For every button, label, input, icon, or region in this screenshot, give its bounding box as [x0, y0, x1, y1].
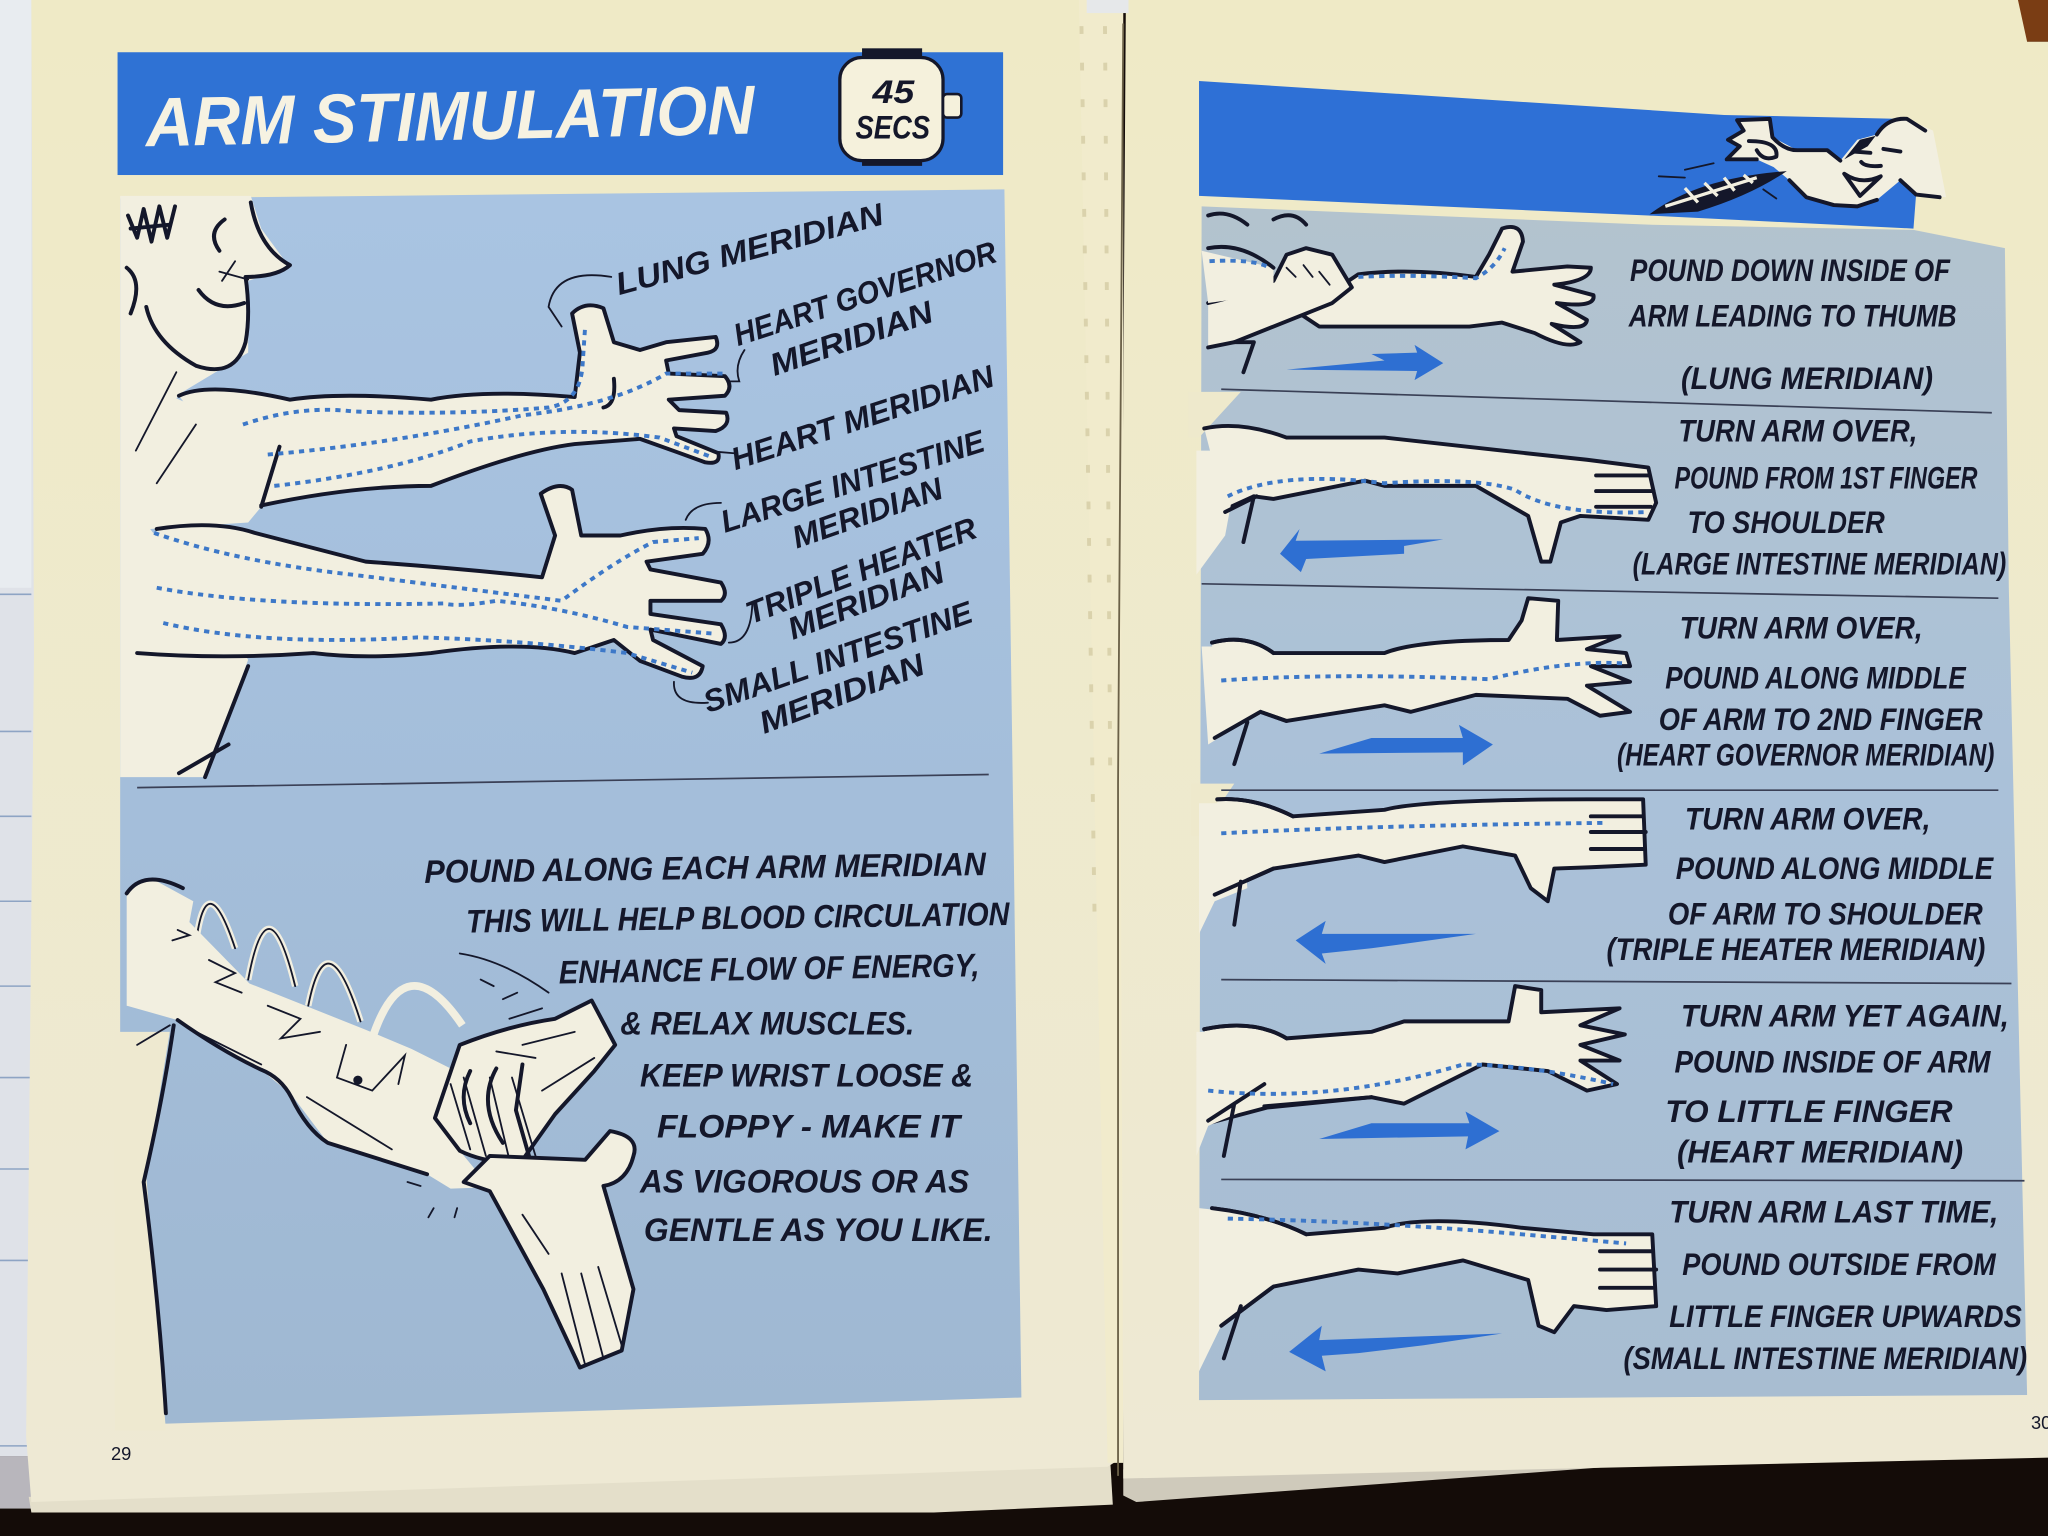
text block: instructions left page: ENHANCE FLOW OF ENERGY, — [558, 946, 980, 991]
under sheet of left page — [29, 1460, 1113, 1512]
panel: right page header band — [1199, 81, 1916, 229]
labels: meridian names — [612, 196, 1001, 741]
text: step 3: POUND ALONG MIDDLE — [1665, 660, 1967, 695]
panel: right page blue background — [1199, 206, 2027, 1400]
row 3: heart governor meridian — [1202, 598, 1630, 765]
text: step 4: TURN ARM OVER, — [1685, 801, 1930, 836]
cream cut-outs at left edge — [1189, 392, 1241, 438]
text: step 2 — [1633, 413, 2006, 582]
icon: stopwatch 45 secs: 45 — [871, 73, 915, 110]
arrow — [1287, 345, 1443, 380]
text: step 3 — [1617, 611, 1994, 772]
mascot face — [1844, 149, 1900, 196]
text: step 5: (HEART MERIDIAN) — [1677, 1134, 1963, 1169]
row 4: triple heater meridian — [1199, 799, 1646, 964]
motion arcs — [196, 904, 549, 1038]
pounding arm — [1208, 248, 1352, 347]
labels: meridian names: LUNG MERIDIAN — [612, 196, 889, 302]
text block: instructions left page — [424, 845, 1011, 1248]
text: step 4: (TRIPLE HEATER MERIDIAN) — [1607, 932, 1985, 967]
labels: meridian names: LARGE INTESTINE — [716, 423, 990, 540]
text: step 1: ARM LEADING TO THUMB — [1628, 299, 1957, 334]
text: step 4 — [1607, 801, 1994, 967]
labels: meridian names: SMALL INTESTINE — [699, 594, 978, 720]
panel: blue background of left page — [120, 189, 1021, 1424]
notebook paper behind the book — [0, 0, 39, 1509]
row 6: small intestine meridian — [1199, 1208, 1656, 1371]
arm — [1300, 227, 1594, 345]
title: ARM STIMULATION — [143, 71, 757, 161]
text: step 6: POUND OUTSIDE FROM — [1682, 1247, 1997, 1282]
figure body white area — [120, 196, 290, 777]
page number 29: 29 — [111, 1443, 131, 1464]
brown table corner — [2018, 0, 2048, 42]
under sheet of right page — [1123, 1460, 1698, 1502]
labels: meridian names: MERIDIAN — [765, 294, 939, 383]
text: step 6 — [1624, 1195, 2027, 1376]
row 5: heart meridian — [1196, 986, 1625, 1156]
labels: meridian names: HEART GOVERNOR — [729, 235, 1001, 353]
text: step 4: POUND ALONG MIDDLE — [1676, 851, 1994, 886]
text: step 1: POUND DOWN INSIDE OF — [1630, 253, 1951, 288]
labels: meridian names: HEART MERIDIAN — [727, 358, 1000, 477]
text: step 5: POUND INSIDE OF ARM — [1674, 1044, 1991, 1079]
text: step 3: OF ARM TO 2ND FINGER — [1659, 702, 1983, 737]
text: step 6: TURN ARM LAST TIME, — [1669, 1195, 1998, 1230]
text: step 5: TURN ARM YET AGAIN, — [1681, 999, 2009, 1034]
text: step 2: TURN ARM OVER, — [1678, 413, 1917, 448]
text block: instructions left page: POUND ALONG EACH ARM MERIDIAN — [424, 845, 988, 890]
shoulder and forearm — [127, 878, 490, 1189]
text: step 3: TURN ARM OVER, — [1680, 611, 1923, 646]
text: step 1 — [1628, 253, 1957, 396]
cream area left of body — [115, 1032, 170, 1430]
illustration: mascot with feather — [1650, 119, 1946, 214]
icon: stopwatch 45 secs — [840, 48, 961, 166]
row 2: large intestine meridian — [1196, 426, 1656, 575]
panel: left page header — [118, 48, 1003, 175]
right book page — [1121, 0, 2048, 1479]
labels: meridian names: MERIDIAN — [788, 471, 949, 555]
text: step 1: (LUNG MERIDIAN) — [1681, 361, 1933, 396]
text block: instructions left page: AS VIGOROUS OR AS — [639, 1162, 969, 1199]
upper arm — [179, 275, 729, 507]
feather — [1650, 171, 1787, 214]
text block: instructions left page: & RELAX MUSCLES. — [620, 1004, 914, 1041]
labels: meridian names: TRIPLE HEATER — [741, 511, 982, 631]
slip of paper at top of spine — [1087, 0, 1128, 13]
illustration: man with arms showing meridians — [120, 196, 752, 777]
lower arm — [137, 486, 725, 777]
mascot body — [1727, 119, 1946, 206]
row 1: lung meridian — [1202, 214, 1594, 380]
text block: instructions left page: THIS WILL HELP BLOOD CIRCULATION — [466, 895, 1011, 940]
text: step 5 — [1665, 999, 2009, 1169]
body outline — [144, 1025, 174, 1413]
text block: instructions left page: GENTLE AS YOU LIKE. — [644, 1211, 993, 1248]
fist — [435, 1000, 615, 1164]
pointer arrows — [674, 350, 752, 703]
text block: instructions left page: KEEP WRIST LOOSE & — [640, 1057, 973, 1094]
labels: meridian names: MERIDIAN — [783, 554, 950, 647]
text: step 4: OF ARM TO SHOULDER — [1668, 897, 1983, 932]
icon: stopwatch 45 secs: SECS — [856, 108, 930, 145]
text: step 2: TO SHOULDER — [1688, 505, 1885, 540]
text: step 5: TO LITTLE FINGER — [1665, 1094, 1953, 1129]
left book page — [26, 0, 1118, 1502]
labels: meridian names: MERIDIAN — [754, 646, 931, 741]
illustration: fist pounding along forearm — [127, 878, 635, 1413]
text block: instructions left page: FLOPPY - MAKE IT — [657, 1108, 963, 1145]
head and face — [127, 202, 290, 483]
spine line — [1118, 24, 1123, 1476]
lower hand — [464, 1131, 635, 1368]
spine perforated strip — [1079, 0, 1123, 1463]
